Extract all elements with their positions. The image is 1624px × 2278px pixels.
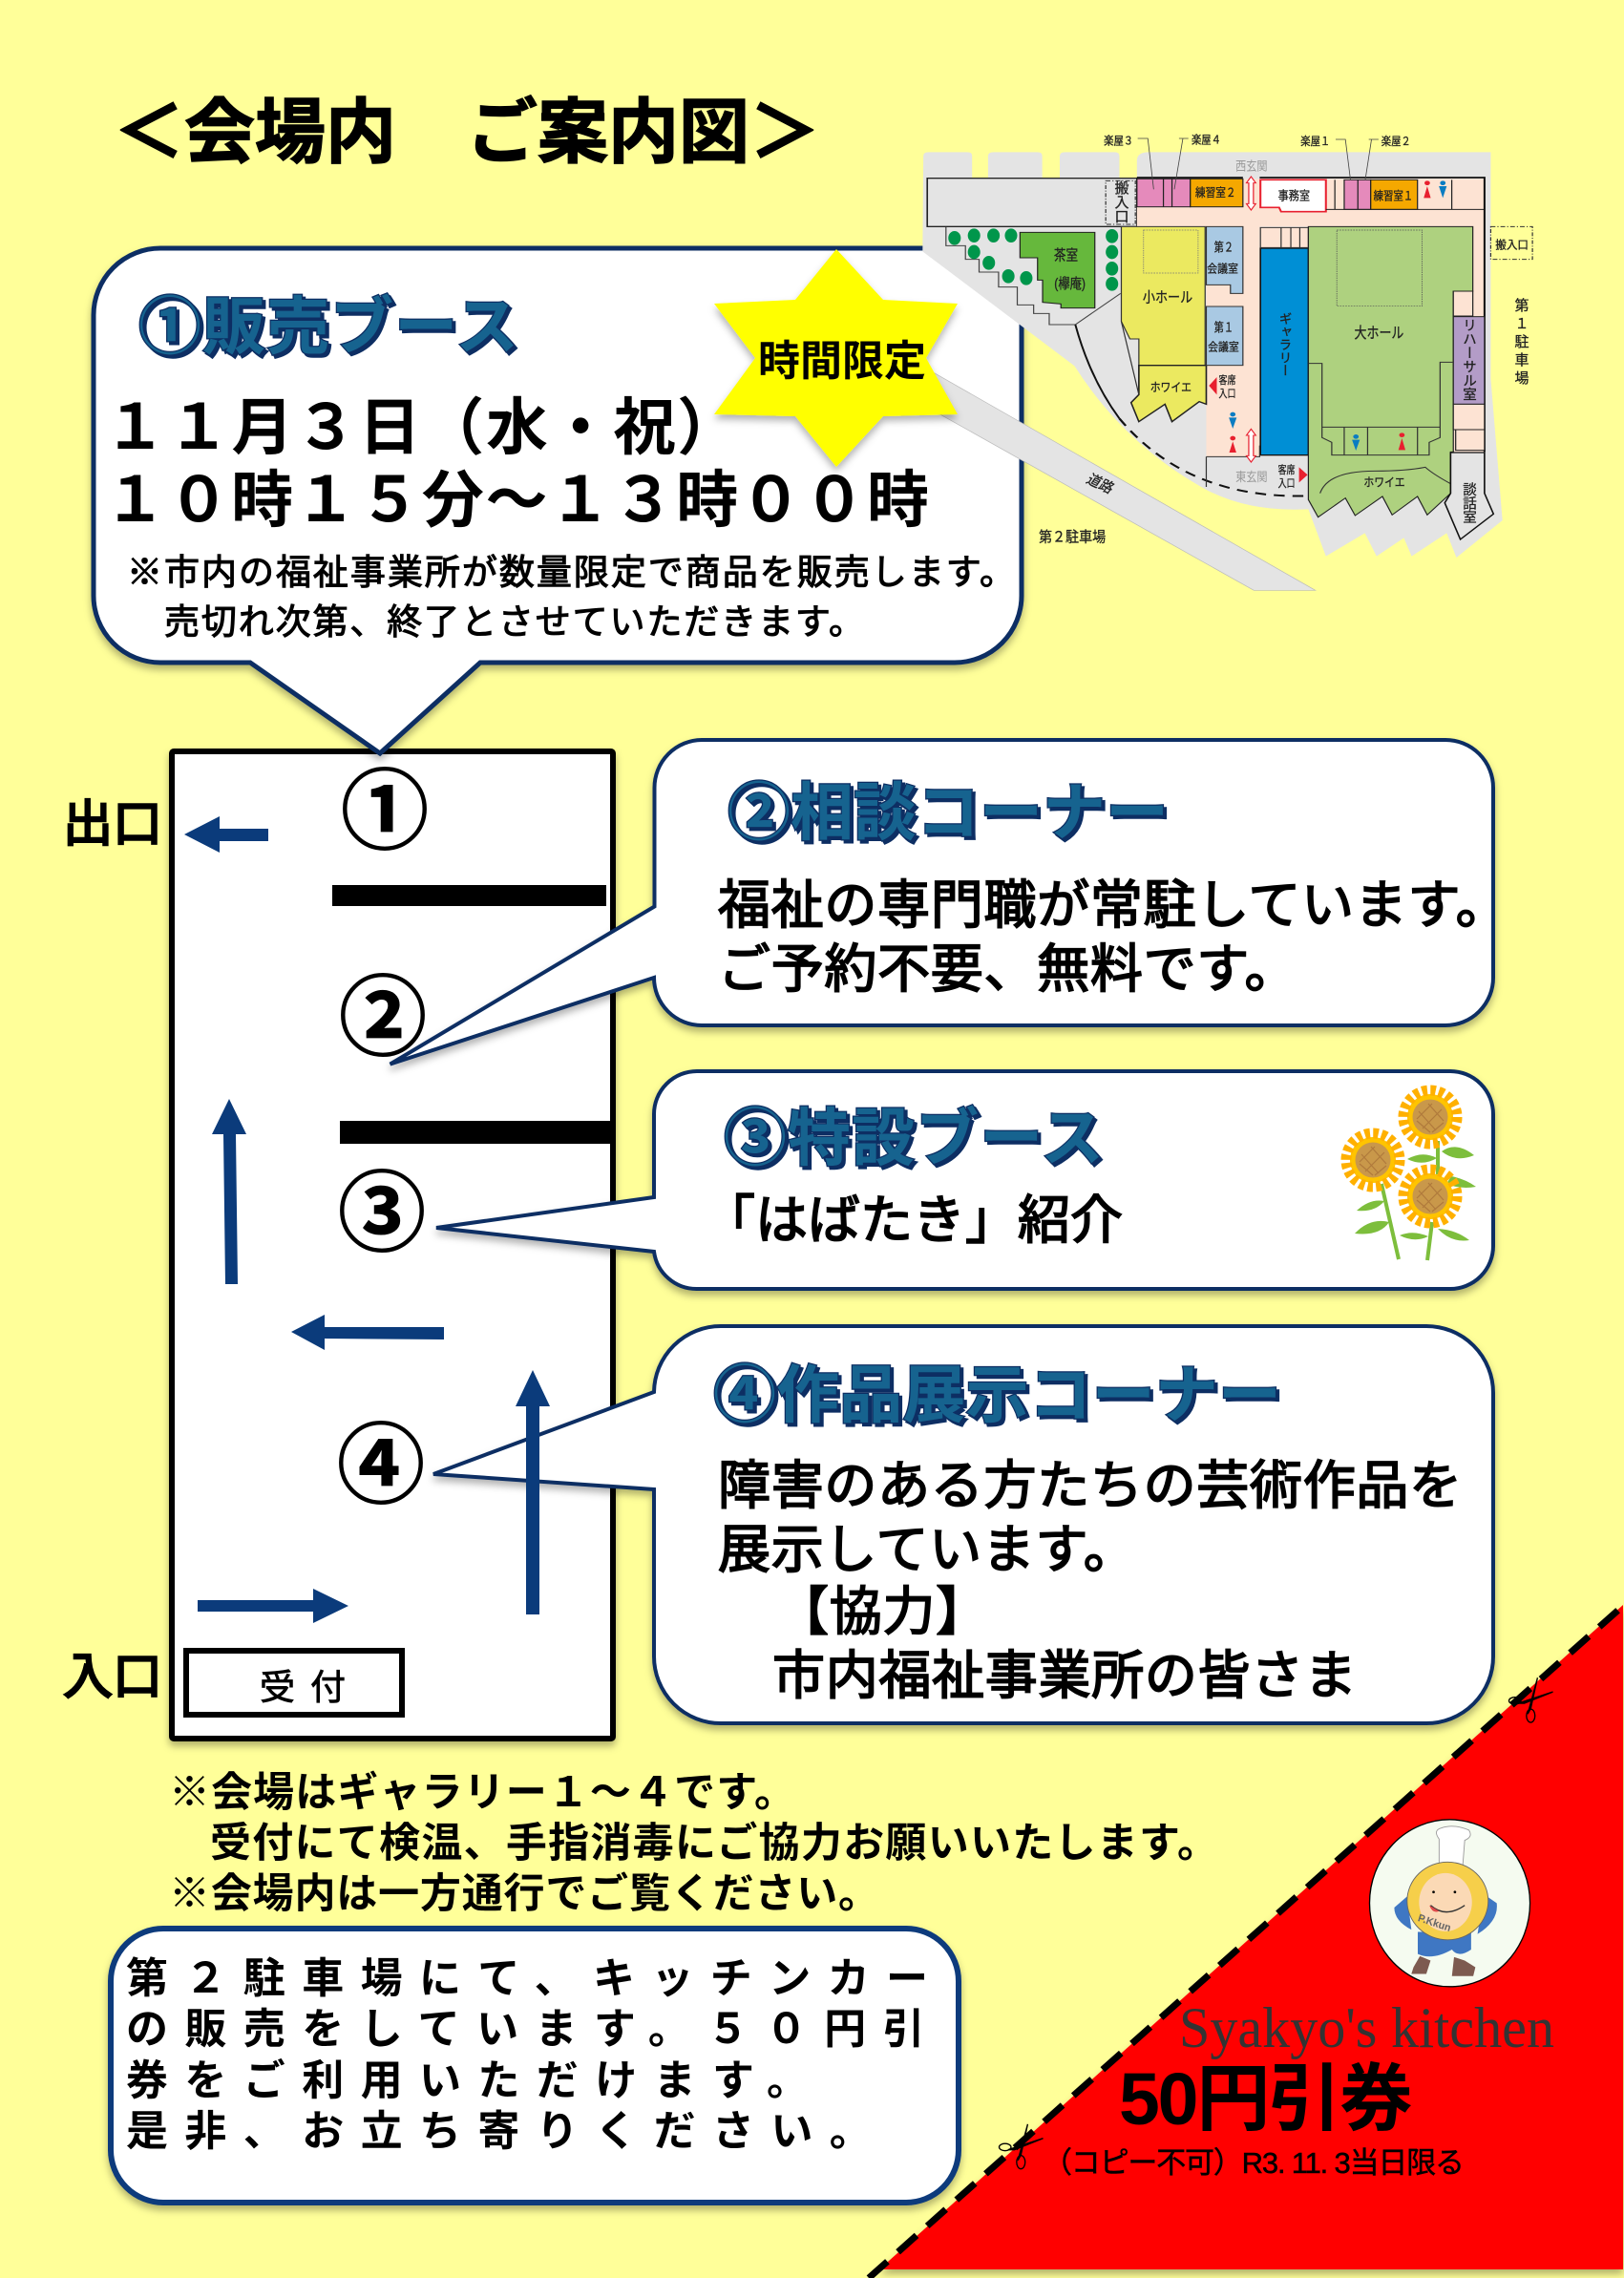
map labels: 練習室１ [1374,189,1413,202]
heading: sales booth: ①販売ブース [138,291,518,362]
gallery [1260,248,1308,455]
partition bar upper [332,885,606,906]
entrance label: 入口 [63,1650,162,1705]
map labels: 事務室 [1278,189,1310,203]
trees [948,228,1118,291]
partition bar lower [340,1121,613,1144]
map labels: ホワイエ [1363,475,1405,489]
map labels: 楽屋３ [1104,135,1133,147]
kitchen car text: 第２駐車場にて、キッチンカー [126,1955,944,2002]
icon: sunflowers [1346,1090,1476,1260]
panel: kitchen car [111,1929,959,2203]
meeting rooms [1206,226,1243,293]
panel: special booth [436,1071,1493,1289]
special booth text: 「はばたき」紹介 [703,1191,1123,1250]
kitchen car text [126,1955,944,2155]
reception box [186,1651,402,1715]
map labels: 東玄関 [1235,470,1268,485]
brand name: Syakyo's kitchen [1179,1996,1554,2059]
map labels: (欅庵) [1054,276,1086,292]
large hall [1308,226,1473,517]
map labels: 客席 [1219,374,1236,387]
coupon triangle [879,1605,1623,2269]
sunflower left [1346,1133,1400,1187]
notes [169,1770,1218,1917]
route diagram frame [172,751,613,1739]
sunflower top [1403,1090,1457,1144]
rehearsal room [1453,317,1485,404]
title: ＜会場内 ご案内図＞ [114,93,820,172]
venue map [922,134,1532,590]
vertical map labels: 搬入口 [1113,180,1128,223]
vertical map labels [1113,180,1529,523]
heading: consultation corner: ②相談コーナー [728,777,1169,848]
kitchen car text: 券をご利用いただけます。 [126,2057,825,2104]
loading area [927,179,1137,226]
consultation text [718,875,1508,999]
map labels: 楽屋４ [1192,134,1221,146]
note [127,553,1015,642]
map labels: 入口 [1219,388,1235,400]
marker 1: ① [341,764,429,861]
mascot: P.Kkun [1417,1912,1452,1934]
driveway line [1075,325,1119,418]
cut line [869,1605,1624,2278]
coupon terms: （コピー不可）R3. 11. 3当日限る [1043,2146,1465,2180]
exit label: 出口 [63,797,162,853]
artwork text [718,1456,1463,1705]
consultation text: 福祉の専門職が常駐しています。 [718,875,1508,935]
heading: special booth: ③特設ブース [724,1103,1104,1173]
service rooms [1453,291,1485,451]
map labels: 入口 [1278,477,1296,490]
vertical map labels: 第１駐車場 [1512,298,1529,389]
marker 2: ② [339,970,427,1067]
top rooms [1137,178,1485,452]
map labels: 第２ [1214,241,1234,255]
notes: ※会場内は一方通行でご覧ください。 [169,1871,879,1917]
map labels: 西玄関 [1235,159,1268,174]
corridors [1137,179,1485,456]
date: １１月３日（水・祝） [104,392,739,462]
map labels [1039,134,1529,545]
kitchen car text: 是非、お立ち寄りください。 [126,2108,888,2155]
leader lines [1138,138,1379,189]
map labels: 道路 [1084,472,1117,496]
vertical map labels: 談話室 [1461,482,1476,523]
map labels: 茶室 [1054,246,1078,264]
map labels: 楽屋１ [1300,135,1330,148]
artwork text: 市内福祉事業所の皆さま [772,1646,1358,1705]
marker 3: ③ [338,1166,426,1263]
lounge [1445,453,1493,539]
map road [926,369,1316,590]
small hall foyer [1131,366,1206,422]
arrow: from entrance [198,1589,348,1623]
mascot [1369,1820,1530,1987]
panel: sales booth [94,248,1022,753]
artwork text: 展示しています。 [718,1520,1136,1579]
map labels: 客席 [1278,464,1296,476]
arrows: route [184,816,550,1623]
artwork text: 【協力】 [776,1582,989,1641]
star: limited time [714,249,958,467]
panel: consultation corner [390,740,1508,1065]
map labels: 会議室 [1208,341,1239,353]
star: limited time: 時間限定 [758,338,926,385]
icon: scissors upper [1508,1677,1553,1722]
consultation text: ご予約不要、無料です。 [718,939,1297,999]
map labels: 小ホール [1143,288,1192,306]
time: １０時１５分～１３時００時 [104,465,929,535]
map labels: 会議室 [1207,263,1238,275]
vertical map labels: リハーサル室 [1461,318,1476,401]
arrow: upward right [516,1370,550,1614]
note: 売切れ次第、終了とさせていただきます。 [164,602,864,642]
icon: scissors lower [999,2124,1044,2169]
panel: artwork corner [433,1326,1493,1723]
map labels: 第２駐車場 [1039,528,1106,545]
arrow: upward left [212,1099,246,1284]
map labels: 搬入口 [1495,239,1529,251]
map labels: ホワイエ [1150,380,1192,394]
marker 4: ④ [337,1418,425,1515]
map labels: 楽屋２ [1381,135,1411,148]
map labels: 第１ [1214,321,1234,335]
notes: ※会場はギャラリー１～４です。 [169,1770,795,1816]
kitchen car text: の販売をしています。５０円引 [126,2006,941,2053]
notes: 受付にて検温、手指消毒にご協力お願いいたします。 [210,1821,1218,1867]
map labels: 練習室２ [1195,185,1235,200]
arrow: leftward middle [291,1315,444,1350]
sunflower bottom [1403,1170,1457,1223]
vertical map labels: ギャラリー [1277,312,1291,376]
reception box: 受付 [260,1668,361,1707]
coupon [869,1605,1624,2278]
tea room [1020,232,1095,308]
loading bay right [1490,226,1532,260]
map land [922,152,1503,558]
small hall [1121,226,1205,366]
map labels: 大ホール [1355,325,1403,342]
upper gallery rooms [1260,227,1308,247]
door arrows [1247,177,1255,462]
restroom pictograms [1230,180,1431,453]
heading: artwork corner: ④作品展示コーナー [713,1360,1281,1430]
note: ※市内の福祉事業所が数量限定で商品を販売します。 [127,553,1015,592]
stepped garden outline [946,226,1121,325]
arrow: to exit [184,816,268,853]
artwork text: 障害のある方たちの芸術作品を [718,1456,1463,1515]
coupon value: 50円引券 [1119,2058,1413,2141]
